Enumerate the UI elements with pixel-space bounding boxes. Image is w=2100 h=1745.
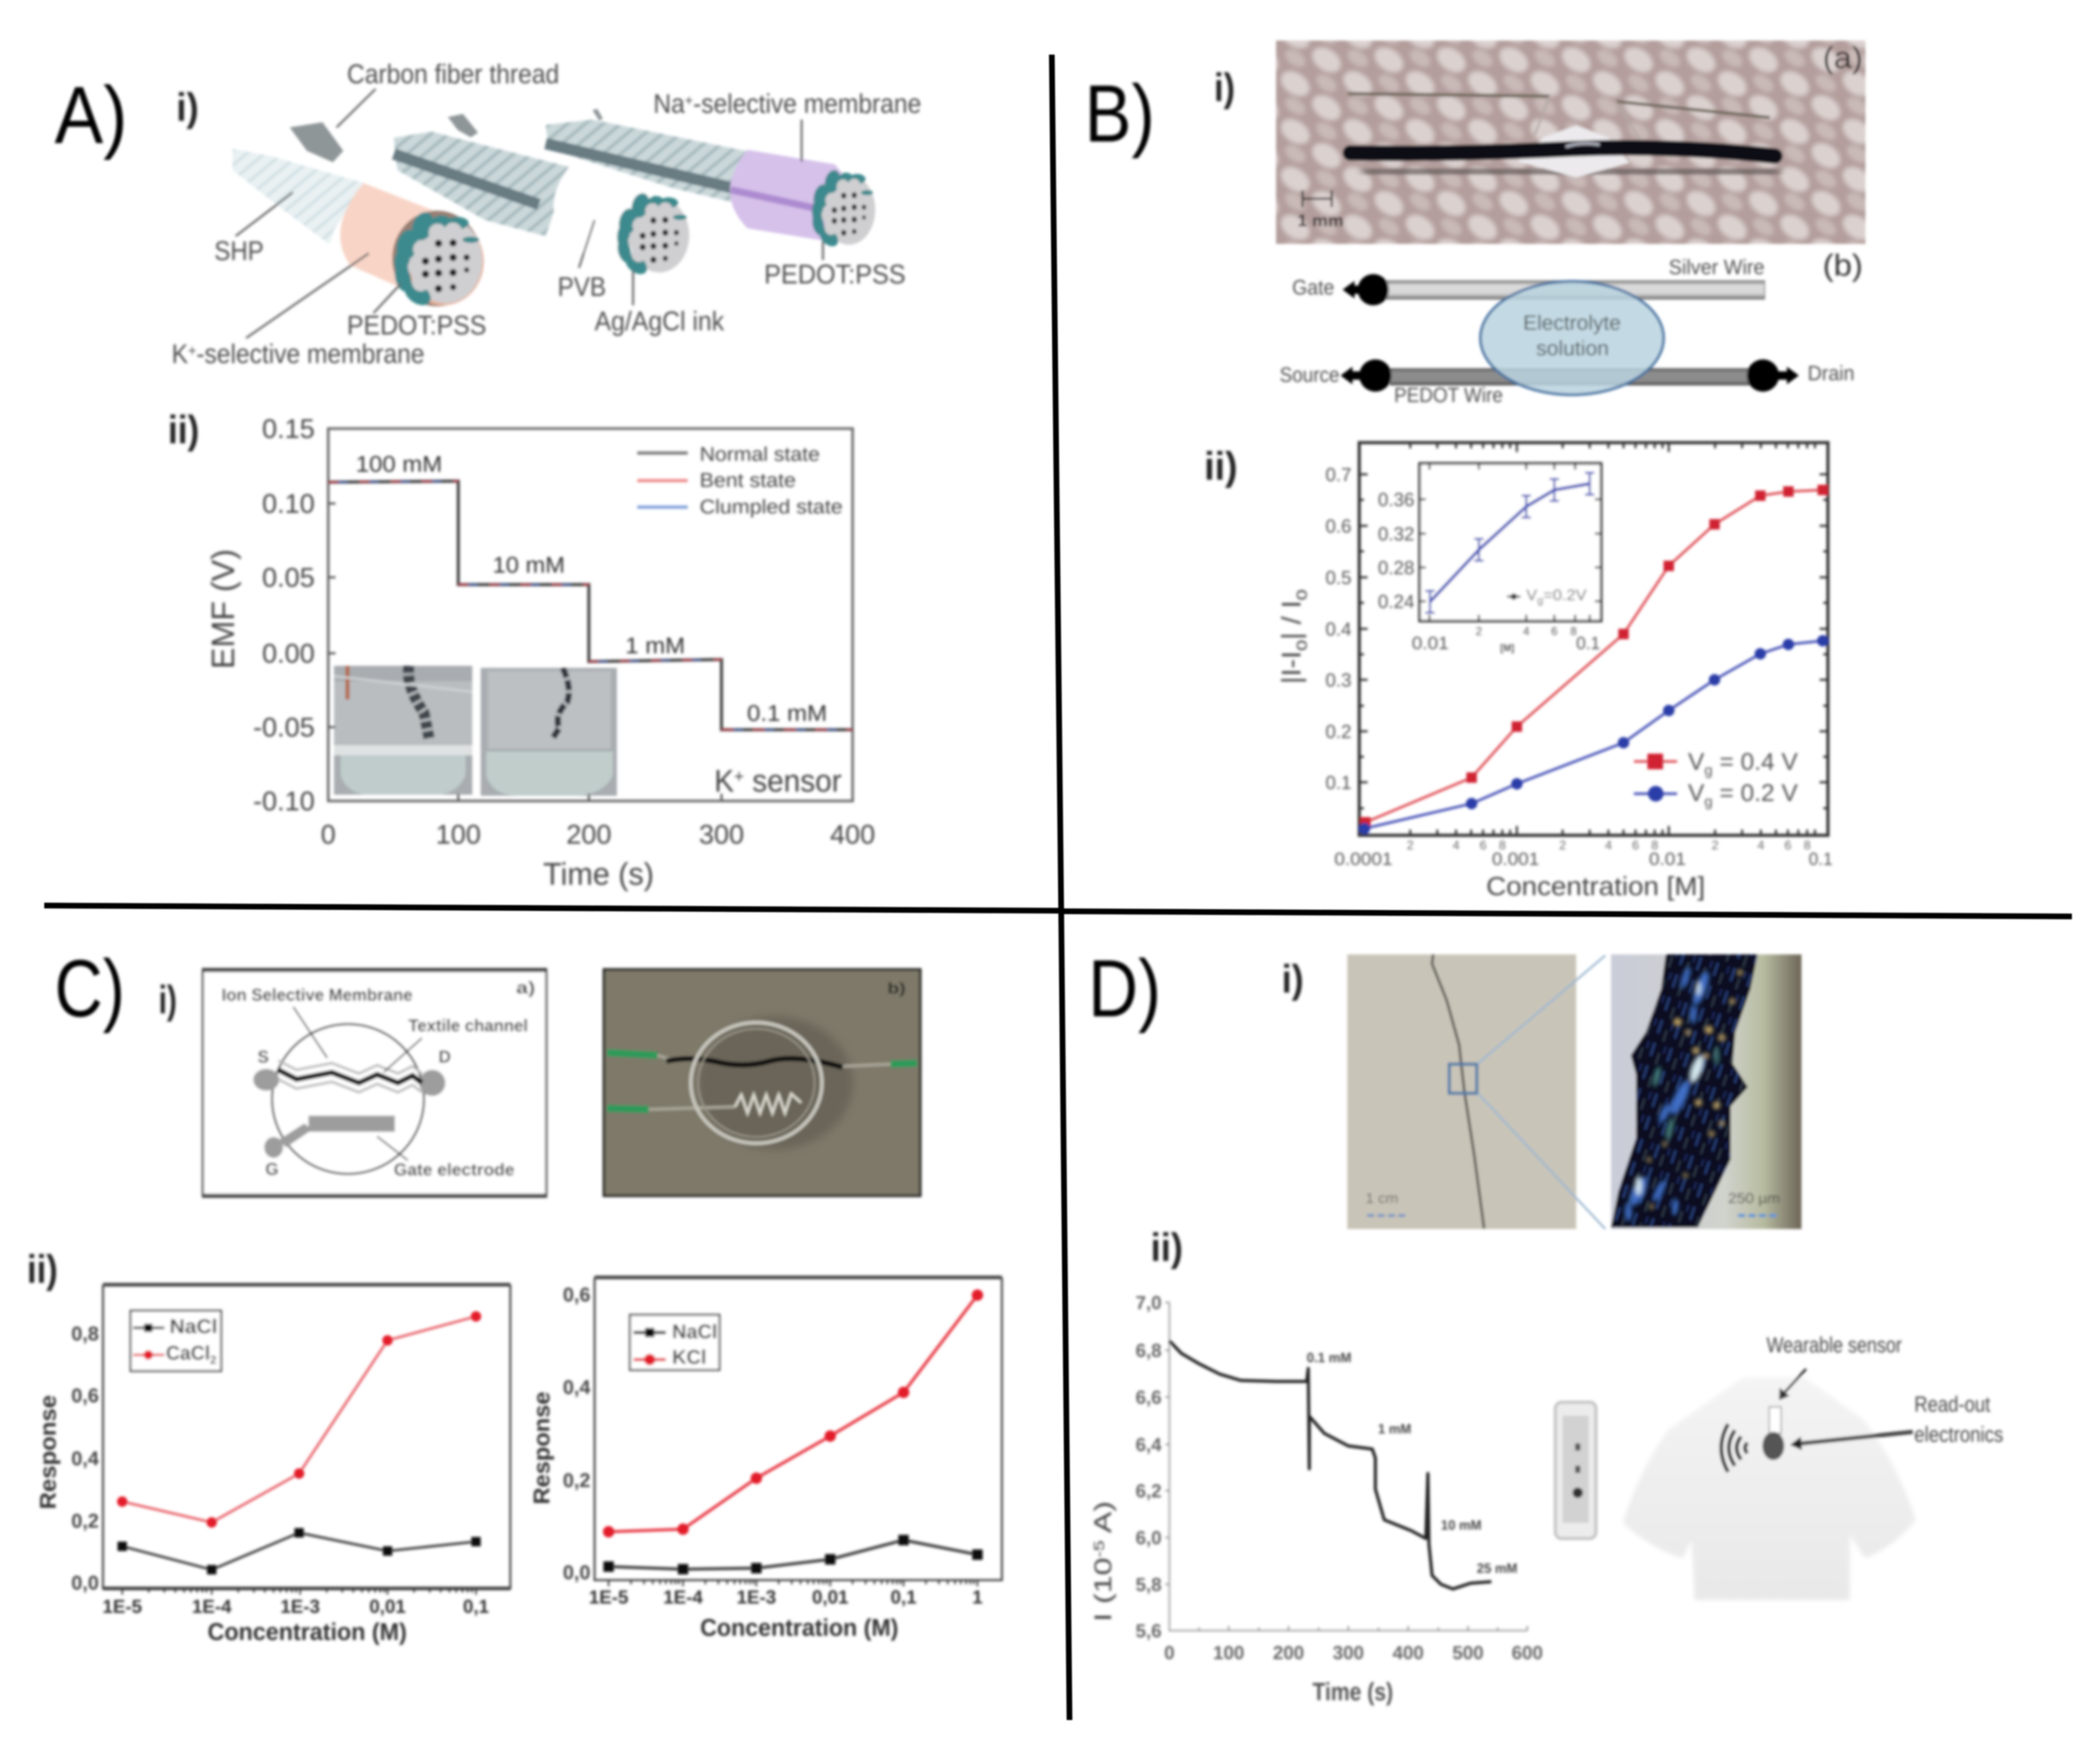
x labels: 200 bbox=[1273, 1642, 1304, 1663]
y axis title: o bbox=[1290, 640, 1311, 651]
(a) tag: (a) bbox=[1823, 41, 1863, 75]
cable labels: SHP bbox=[214, 236, 264, 266]
photo: thread overview bbox=[1347, 954, 1605, 1229]
y axis title: Response bbox=[35, 1395, 61, 1509]
x labels: 1E-4 bbox=[192, 1596, 231, 1617]
y labels bbox=[563, 1284, 590, 1584]
photo: thread micrograph bbox=[1611, 954, 1801, 1229]
sub-label: B i): i) bbox=[1214, 66, 1235, 110]
minor tick labels: 6 bbox=[1784, 838, 1792, 852]
legend: = 0.2 V bbox=[1712, 779, 1798, 806]
y labels: 0,6 bbox=[563, 1284, 590, 1306]
beaker photo left bbox=[334, 666, 472, 796]
legend: V bbox=[1688, 748, 1704, 775]
chart: NaCl vs CaCl2 bbox=[35, 1285, 510, 1645]
shirt labels bbox=[1767, 1333, 2003, 1446]
y labels: 0,2 bbox=[71, 1510, 99, 1532]
y tick labels: 0.7 bbox=[1325, 464, 1351, 485]
y axis tick labels: 0.00 bbox=[262, 639, 315, 669]
y labels: 0,4 bbox=[71, 1448, 99, 1470]
legend: Normal state bbox=[700, 444, 820, 466]
inset legend: g bbox=[1537, 595, 1543, 606]
legend: g bbox=[1704, 762, 1712, 778]
x labels: 1E-3 bbox=[280, 1596, 320, 1617]
wire labels: Drain bbox=[1808, 362, 1854, 385]
electrolyte ellipse bbox=[1480, 281, 1664, 395]
thread tips bbox=[290, 109, 603, 162]
sub-label: D ii): ii) bbox=[1151, 1225, 1183, 1270]
axis title: Concentration (M) bbox=[700, 1614, 898, 1641]
y labels: 6,8 bbox=[1136, 1340, 1162, 1361]
x axis tick labels: 0 bbox=[321, 820, 336, 850]
x axis tick labels: 300 bbox=[699, 820, 744, 850]
pink K+ membrane bbox=[340, 183, 481, 292]
legend bbox=[1634, 748, 1798, 809]
schematic labels: S bbox=[257, 1047, 269, 1066]
x tick labels bbox=[1334, 849, 1833, 869]
black series bbox=[603, 1535, 983, 1574]
y labels: 0,0 bbox=[563, 1562, 590, 1584]
sub-label: B ii): ii) bbox=[1204, 444, 1238, 488]
beaker photo right bbox=[481, 668, 617, 796]
scale arrow bbox=[1738, 1214, 1776, 1217]
schematic labels: Gate electrode bbox=[394, 1160, 514, 1179]
minor tick labels: 4 bbox=[1757, 838, 1764, 852]
(b) tag: (b) bbox=[1823, 249, 1863, 282]
legend: CaCl bbox=[166, 1342, 211, 1364]
x labels: 300 bbox=[1333, 1642, 1364, 1663]
y labels bbox=[1136, 1292, 1162, 1641]
scale arrow bbox=[1367, 1214, 1406, 1217]
read-out electronics bbox=[1762, 1432, 1784, 1460]
cross-section 1 bbox=[392, 209, 484, 310]
inset x labels: 6 bbox=[1551, 625, 1557, 638]
legend: 2 bbox=[210, 1353, 216, 1366]
cable labels: -selective membrane bbox=[693, 89, 921, 119]
y labels: 6,6 bbox=[1136, 1387, 1162, 1408]
cable labels: -selective membrane bbox=[196, 339, 424, 369]
axis titles: Time (s) bbox=[543, 857, 654, 891]
chart: EMF vs time, K+ sensor bbox=[205, 414, 875, 891]
panel D bbox=[1088, 943, 2003, 1706]
x labels: 100 bbox=[1213, 1642, 1244, 1663]
x labels: 400 bbox=[1393, 1642, 1424, 1663]
blue and yellow highlights bbox=[1625, 966, 1743, 1221]
red series Vg 0.4 bbox=[1360, 485, 1828, 828]
heading: C): C) bbox=[55, 943, 125, 1034]
ticks bbox=[609, 1580, 977, 1586]
x labels: 1E-5 bbox=[102, 1596, 142, 1617]
shirt labels: Read-out bbox=[1914, 1392, 1990, 1416]
legend: = 0.4 V bbox=[1712, 748, 1798, 775]
minor tick labels: 4 bbox=[1452, 838, 1460, 852]
cross-section 3 bbox=[810, 167, 875, 250]
schematic labels: D bbox=[439, 1047, 451, 1066]
chart: current vs time bbox=[1089, 1292, 1543, 1706]
step trace bbox=[328, 481, 853, 730]
x axis tick labels bbox=[321, 820, 875, 850]
legend: Bent state bbox=[700, 470, 796, 492]
x labels: 0,01 bbox=[812, 1586, 848, 1608]
fabric bbox=[1269, 34, 1873, 252]
inset x labels: 2 bbox=[1476, 625, 1482, 638]
silver wire bbox=[1385, 281, 1764, 299]
y axis title: o bbox=[1290, 589, 1311, 600]
y axis title: A) bbox=[1089, 1501, 1116, 1540]
x tick labels: 0.1 bbox=[1809, 849, 1833, 869]
icon: phone bbox=[1555, 1402, 1596, 1539]
y labels: 0,8 bbox=[71, 1323, 99, 1345]
current trace bbox=[1169, 1341, 1491, 1589]
wire labels: Silver Wire bbox=[1669, 256, 1764, 279]
inset y labels: 0.24 bbox=[1378, 591, 1414, 612]
y axis title: EMF (V) bbox=[205, 549, 241, 669]
sub-label: D i): i) bbox=[1282, 957, 1304, 1001]
y labels: 0,0 bbox=[71, 1572, 99, 1594]
log ticks bbox=[1359, 443, 1828, 835]
legend: Clumpled state bbox=[700, 496, 843, 518]
step labels: 0.1 mM bbox=[1307, 1350, 1351, 1365]
minor tick labels: 8 bbox=[1499, 838, 1506, 852]
heading: A): A) bbox=[55, 70, 127, 161]
step labels: 0.1 mM bbox=[747, 701, 827, 726]
cable labels: PEDOT:PSS bbox=[347, 311, 486, 341]
backdrop bbox=[604, 970, 920, 1196]
y labels: 6,4 bbox=[1136, 1434, 1162, 1455]
icon: wireless signal bbox=[1721, 1424, 1747, 1472]
step labels: 1 mM bbox=[1378, 1421, 1411, 1437]
heading: D): D) bbox=[1088, 943, 1161, 1034]
cable labels: Na bbox=[653, 89, 688, 119]
minor tick labels: 6 bbox=[1479, 838, 1487, 852]
schematic: textile transistor in well bbox=[202, 970, 547, 1196]
inset x labels: 0.01 bbox=[1412, 634, 1449, 653]
x tick labels: 0.001 bbox=[1492, 849, 1539, 869]
red series bbox=[117, 1311, 481, 1528]
zoom box bbox=[1449, 1064, 1477, 1093]
y tick labels: 0.4 bbox=[1325, 618, 1351, 640]
K+ sensor caption: + bbox=[734, 767, 744, 786]
y labels: 7,0 bbox=[1136, 1292, 1162, 1313]
panel A bbox=[55, 59, 921, 891]
legend: KCl bbox=[672, 1347, 706, 1368]
wire labels: Source bbox=[1280, 364, 1339, 386]
y axis title: |I-I bbox=[1277, 653, 1307, 684]
x axis tick labels: 200 bbox=[566, 820, 611, 850]
arrow to electronics bbox=[1790, 1432, 1913, 1450]
cable labels: + bbox=[685, 92, 693, 109]
step labels: 10 mM bbox=[1441, 1517, 1481, 1533]
y labels: 0,2 bbox=[563, 1470, 590, 1492]
x labels: 1E-3 bbox=[737, 1586, 776, 1608]
cable labels: PVB bbox=[558, 272, 606, 302]
x labels: 0,1 bbox=[463, 1596, 489, 1617]
y tick labels: 0.2 bbox=[1325, 721, 1351, 742]
inset legend bbox=[1507, 587, 1587, 606]
x tick labels: 0.01 bbox=[1649, 849, 1686, 869]
silver wires bbox=[1348, 94, 1770, 118]
minor tick labels: 6 bbox=[1632, 838, 1639, 852]
minor tick labels: 8 bbox=[1651, 838, 1658, 852]
wire labels: Gate bbox=[1292, 276, 1334, 299]
backdrop bbox=[1611, 954, 1801, 1229]
illustration: carbon fiber thread sensors bbox=[172, 59, 921, 369]
illustration: t-shirt with wearable sensor bbox=[1623, 1333, 2003, 1600]
y axis tick labels: -0.05 bbox=[253, 713, 315, 743]
step labels: 25 mM bbox=[1477, 1560, 1517, 1576]
schematic labels: Ion Selective Membrane bbox=[222, 985, 413, 1004]
cable 3 body bbox=[546, 120, 748, 202]
panel C bbox=[27, 943, 1002, 1645]
y labels: 5,8 bbox=[1136, 1574, 1162, 1595]
heading: B): B) bbox=[1085, 69, 1155, 159]
inset y labels: 0.36 bbox=[1378, 489, 1414, 510]
electrolyte droplet bbox=[1517, 125, 1629, 177]
schematic labels: G bbox=[265, 1159, 279, 1179]
sub-label: A i): i) bbox=[176, 85, 199, 130]
inset y labels bbox=[1378, 489, 1414, 612]
x axis tick labels: 100 bbox=[436, 820, 481, 850]
shirt labels: Wearable sensor bbox=[1767, 1333, 1902, 1357]
minor tick labels: 2 bbox=[1711, 838, 1719, 852]
shirt labels: electronics bbox=[1914, 1422, 2003, 1446]
frame bbox=[103, 1285, 510, 1588]
thread shadow bbox=[1363, 169, 1779, 174]
white PVB layer bbox=[553, 167, 676, 270]
cable labels bbox=[172, 59, 921, 369]
chart: NaCl vs KCl bbox=[529, 1277, 1002, 1641]
purple Na+ membrane bbox=[730, 150, 874, 241]
well circle bbox=[272, 1024, 424, 1174]
sensor strip bbox=[1769, 1407, 1781, 1433]
axis title: Time (s) bbox=[1312, 1678, 1393, 1706]
leaders bbox=[293, 1007, 422, 1160]
ion selective membrane traces bbox=[278, 1061, 422, 1092]
y labels: 5,6 bbox=[1136, 1620, 1162, 1641]
schematic labels bbox=[222, 978, 535, 1179]
legend: NaCl bbox=[672, 1321, 717, 1343]
textile channel bbox=[278, 1070, 422, 1083]
y axis title: | / I bbox=[1277, 600, 1307, 640]
zoom lines bbox=[1478, 955, 1605, 1229]
wire labels: Electrolyte bbox=[1523, 312, 1621, 334]
black thread bbox=[1350, 148, 1775, 156]
frame bbox=[595, 1277, 1002, 1580]
black series bbox=[118, 1528, 481, 1574]
inset y labels: 0.28 bbox=[1378, 557, 1414, 578]
panel B bbox=[1085, 34, 1873, 901]
y axis tick labels bbox=[253, 414, 315, 817]
gate electrode bbox=[264, 1116, 395, 1158]
y axis title: -5 bbox=[1091, 1540, 1107, 1558]
scale text: 1 cm bbox=[1365, 1190, 1398, 1206]
cable labels: Ag/AgCl ink bbox=[595, 306, 725, 337]
minor tick labels: 4 bbox=[1605, 838, 1612, 852]
chart: response vs concentration bbox=[1277, 443, 1833, 901]
y axis tick labels: 0.05 bbox=[262, 563, 315, 593]
source and drain pads bbox=[253, 1069, 445, 1096]
y labels: 6,2 bbox=[1136, 1480, 1162, 1502]
x labels: 1 bbox=[972, 1586, 983, 1608]
scale text: 250 µm bbox=[1728, 1190, 1780, 1206]
sub-label: C i): i) bbox=[159, 978, 177, 1022]
legend: g bbox=[1704, 793, 1712, 809]
photo: textile transistor device bbox=[604, 970, 920, 1196]
step labels bbox=[1307, 1350, 1517, 1576]
step labels bbox=[356, 451, 827, 726]
backdrop bbox=[1347, 954, 1576, 1229]
legend bbox=[637, 444, 843, 518]
ticks bbox=[122, 1588, 476, 1595]
y tick labels: 0.1 bbox=[1325, 772, 1351, 793]
y tick labels: 0.6 bbox=[1325, 515, 1351, 537]
legend bbox=[131, 1311, 221, 1371]
cable labels: + bbox=[188, 342, 196, 359]
thread bbox=[1432, 954, 1484, 1229]
pedot wire bbox=[1390, 368, 1751, 385]
y labels bbox=[71, 1323, 99, 1594]
axis ticks bbox=[328, 503, 722, 801]
minor tick labels: 8 bbox=[1803, 838, 1811, 852]
schematic: transistor wires bbox=[1280, 249, 1863, 407]
shirt bbox=[1623, 1378, 1916, 1600]
terminals bbox=[1341, 274, 1799, 392]
x axis title: Concentration [M] bbox=[1486, 872, 1705, 901]
photo: thread on fabric bbox=[1269, 34, 1873, 252]
x labels: 0 bbox=[1164, 1642, 1175, 1663]
inset legend: V bbox=[1526, 587, 1537, 604]
cable 2 body bbox=[394, 132, 569, 236]
x labels: 500 bbox=[1452, 1642, 1484, 1663]
y axis title: I (10 bbox=[1089, 1574, 1116, 1622]
scale text: 1 mm bbox=[1297, 211, 1344, 230]
scale bar bbox=[1303, 190, 1332, 207]
y axis tick labels: 0.10 bbox=[262, 489, 315, 519]
x axis tick labels: 400 bbox=[830, 820, 875, 850]
y tick labels: 0.5 bbox=[1325, 567, 1351, 588]
x labels: 0,01 bbox=[369, 1596, 406, 1617]
wire labels: solution bbox=[1536, 337, 1609, 360]
cable labels: K bbox=[172, 339, 190, 369]
y labels: 0,6 bbox=[71, 1385, 99, 1407]
legend: NaCl bbox=[170, 1316, 217, 1338]
y tick labels: 0.3 bbox=[1325, 669, 1351, 691]
thread bbox=[1611, 954, 1758, 1227]
leader lines bbox=[236, 89, 823, 338]
ticks bbox=[1165, 1302, 1527, 1631]
inset x labels: 8 bbox=[1570, 625, 1577, 638]
y tick labels bbox=[1325, 464, 1351, 793]
cable labels: Carbon fiber thread bbox=[347, 59, 559, 89]
inset x labels bbox=[1412, 625, 1600, 653]
y axis tick labels: -0.10 bbox=[253, 786, 315, 817]
inset x labels: [M] bbox=[1500, 643, 1514, 653]
x labels bbox=[1164, 1642, 1543, 1663]
step labels: 100 mM bbox=[356, 451, 442, 477]
x labels: 1E-4 bbox=[663, 1586, 703, 1608]
K+ sensor caption: K bbox=[714, 764, 735, 798]
legend: V bbox=[1688, 779, 1704, 806]
cable labels: PEDOT:PSS bbox=[764, 260, 906, 290]
y axis title: Response bbox=[529, 1392, 555, 1504]
inset x labels: 0.1 bbox=[1576, 634, 1600, 653]
inset chart bbox=[1378, 463, 1601, 653]
inset y labels: 0.32 bbox=[1378, 523, 1414, 545]
red series bbox=[603, 1289, 983, 1537]
minor tick labels: 2 bbox=[1559, 838, 1566, 852]
inset legend: =0.2V bbox=[1543, 587, 1587, 604]
x tick labels: 0.0001 bbox=[1334, 849, 1393, 869]
cross-section 2 bbox=[615, 190, 689, 278]
y axis tick labels: 0.15 bbox=[262, 414, 315, 444]
x labels: 0,1 bbox=[891, 1586, 917, 1608]
schematic labels: Textile channel bbox=[408, 1016, 528, 1035]
arrow to sensor bbox=[1779, 1369, 1806, 1400]
inset series bbox=[1425, 473, 1594, 613]
plot frame bbox=[1359, 443, 1828, 835]
x labels bbox=[102, 1596, 489, 1617]
plot frame bbox=[328, 429, 853, 801]
x labels: 600 bbox=[1512, 1642, 1543, 1663]
wire labels: PEDOT Wire bbox=[1394, 384, 1503, 407]
minor tick labels bbox=[1407, 838, 1811, 852]
sub-label: C ii): ii) bbox=[27, 1247, 58, 1291]
K+ sensor caption: sensor bbox=[744, 764, 842, 798]
legend bbox=[630, 1315, 719, 1370]
inset ticks bbox=[1420, 463, 1601, 621]
axes bbox=[1169, 1302, 1527, 1631]
frame bbox=[203, 970, 546, 1196]
cable 1 body bbox=[233, 149, 364, 244]
inset frame bbox=[1420, 463, 1601, 621]
inset x labels: 4 bbox=[1523, 625, 1529, 638]
minor tick labels: 2 bbox=[1407, 838, 1414, 852]
wire labels bbox=[1280, 256, 1854, 407]
sub-label: A ii): ii) bbox=[168, 408, 199, 452]
y labels: 6,0 bbox=[1136, 1527, 1162, 1548]
schematic labels: a) bbox=[516, 978, 535, 997]
x labels: 1E-5 bbox=[589, 1586, 628, 1608]
step labels: 10 mM bbox=[493, 552, 565, 578]
y labels: 0,4 bbox=[563, 1377, 590, 1399]
step labels: 1 mM bbox=[625, 633, 685, 658]
device bbox=[607, 1016, 917, 1149]
blue series Vg 0.2 bbox=[1359, 635, 1828, 834]
axis title: Concentration (M) bbox=[208, 1618, 407, 1645]
(b) tag: b) bbox=[887, 980, 906, 997]
x labels bbox=[589, 1586, 983, 1608]
